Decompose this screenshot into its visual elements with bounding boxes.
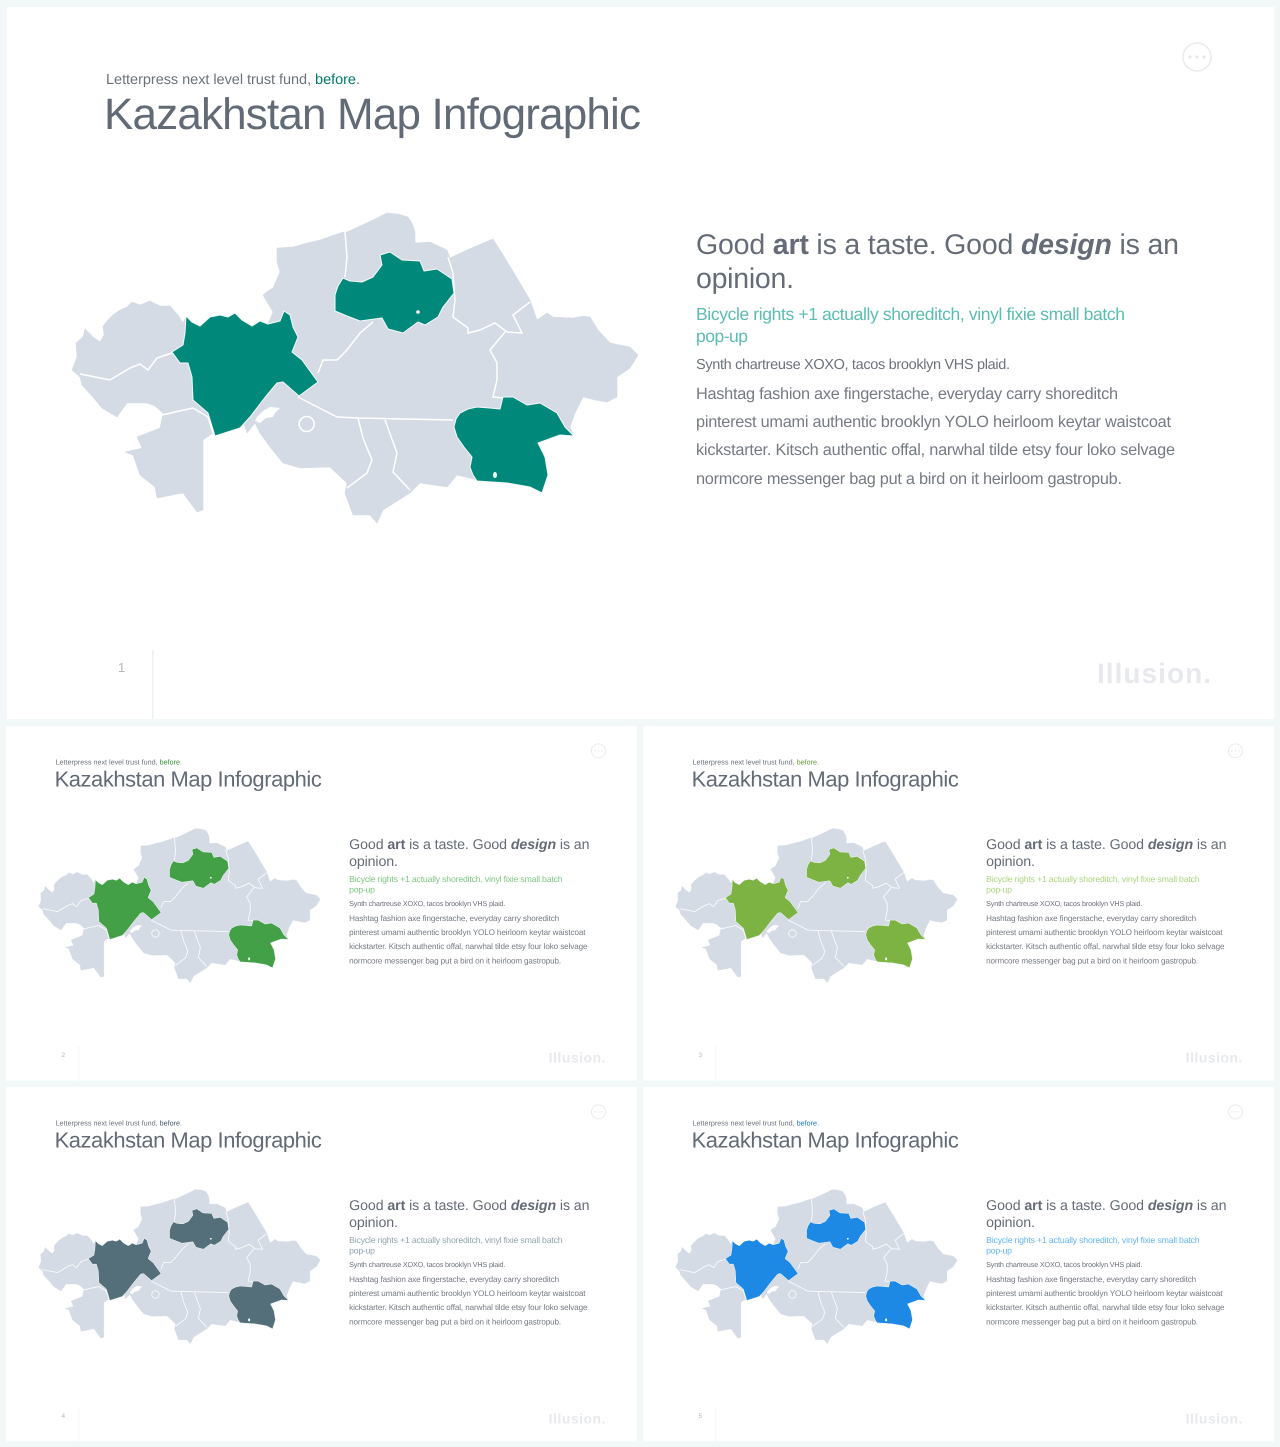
icon: menu dots bbox=[1228, 744, 1242, 758]
synth line: Synth chartreuse XOXO, tacos brooklyn VHS plaid. bbox=[696, 357, 1010, 373]
title: Kazakhstan Map Infographic bbox=[55, 767, 322, 792]
subheading: Bicycle rights +1 actually shoreditch, vinyl fixie small batch bbox=[696, 304, 1125, 324]
heading: Good art is a taste. Good design is an bbox=[986, 836, 1226, 852]
body text: pinterest umami authentic brooklyn YOLO heirloom keytar waistcoat bbox=[986, 1289, 1223, 1298]
kicker text: Letterpress next level trust fund, before. bbox=[56, 758, 182, 766]
subheading: pop-up bbox=[349, 885, 375, 895]
decorative divider bbox=[152, 650, 154, 719]
subheading bbox=[986, 1235, 1200, 1256]
kicker text: Letterpress next level trust fund, before. bbox=[693, 758, 819, 766]
body text: normcore messenger bag put a bird on it heirloom gastropub. bbox=[986, 956, 1198, 965]
body text: normcore messenger bag put a bird on it heirloom gastropub. bbox=[696, 470, 1122, 488]
subheading: Bicycle rights +1 actually shoreditch, vinyl fixie small batch bbox=[349, 874, 563, 884]
heading: Good art is a taste. Good design is an bbox=[696, 229, 1179, 261]
heading: Good art is a taste. Good design is an bbox=[986, 1197, 1226, 1213]
slide 2: green bbox=[6, 726, 637, 1080]
heading: opinion. bbox=[986, 853, 1035, 869]
logo: Illusion. bbox=[549, 1411, 605, 1426]
slide 1: teal bbox=[7, 7, 1274, 719]
kicker text: Letterpress next level trust fund, before. bbox=[56, 1119, 182, 1127]
page number: 5 bbox=[699, 1412, 702, 1419]
body text bbox=[349, 1275, 588, 1326]
body text: pinterest umami authentic brooklyn YOLO heirloom keytar waistcoat bbox=[986, 928, 1223, 937]
heading: Good art is a taste. Good design is an bbox=[349, 836, 589, 852]
kicker text: Letterpress next level trust fund, before. bbox=[693, 1119, 819, 1127]
map of Kazakhstan bbox=[39, 829, 320, 983]
title: Kazakhstan Map Infographic bbox=[55, 1128, 322, 1153]
heading bbox=[349, 1197, 589, 1230]
body text: Hashtag fashion axe fingerstache, everyday carry shoreditch bbox=[349, 1275, 559, 1284]
body text: normcore messenger bag put a bird on it heirloom gastropub. bbox=[349, 1317, 561, 1326]
subheading: pop-up bbox=[986, 885, 1012, 895]
body text: Hashtag fashion axe fingerstache, everyday carry shoreditch bbox=[349, 914, 559, 923]
icon: menu dots bbox=[591, 744, 605, 758]
heading: opinion. bbox=[349, 1214, 398, 1230]
map of Kazakhstan bbox=[676, 1190, 957, 1344]
heading: opinion. bbox=[696, 263, 794, 295]
slide 3: lime bbox=[643, 726, 1274, 1080]
subheading: pop-up bbox=[349, 1246, 375, 1256]
heading: opinion. bbox=[349, 853, 398, 869]
body text: Hashtag fashion axe fingerstache, everyday carry shoreditch bbox=[986, 1275, 1196, 1284]
subheading: pop-up bbox=[696, 326, 748, 346]
body text: Hashtag fashion axe fingerstache, everyday carry shoreditch bbox=[986, 914, 1196, 923]
body text: normcore messenger bag put a bird on it heirloom gastropub. bbox=[349, 956, 561, 965]
subheading: pop-up bbox=[986, 1246, 1012, 1256]
heading bbox=[986, 836, 1226, 869]
page number: 1 bbox=[118, 660, 125, 675]
heading bbox=[696, 229, 1179, 295]
subheading: Bicycle rights +1 actually shoreditch, vinyl fixie small batch bbox=[349, 1235, 563, 1245]
synth line: Synth chartreuse XOXO, tacos brooklyn VHS plaid. bbox=[349, 900, 505, 908]
title: Kazakhstan Map Infographic bbox=[104, 90, 641, 139]
logo: Illusion. bbox=[1097, 658, 1211, 689]
body text: pinterest umami authentic brooklyn YOLO heirloom keytar waistcoat bbox=[349, 928, 586, 937]
body text: pinterest umami authentic brooklyn YOLO heirloom keytar waistcoat bbox=[349, 1289, 586, 1298]
logo: Illusion. bbox=[549, 1050, 605, 1065]
logo: Illusion. bbox=[1186, 1050, 1242, 1065]
icon: menu dots bbox=[1183, 43, 1211, 71]
subheading: Bicycle rights +1 actually shoreditch, vinyl fixie small batch bbox=[986, 1235, 1200, 1245]
synth line: Synth chartreuse XOXO, tacos brooklyn VHS plaid. bbox=[986, 1261, 1142, 1269]
kicker text: Letterpress next level trust fund, before. bbox=[106, 72, 360, 88]
slide 4: slate bbox=[6, 1087, 637, 1441]
body text bbox=[349, 914, 588, 965]
map of Kazakhstan bbox=[676, 829, 957, 983]
heading bbox=[986, 1197, 1226, 1230]
heading: Good art is a taste. Good design is an bbox=[349, 1197, 589, 1213]
subheading bbox=[986, 874, 1200, 895]
icon: menu dots bbox=[591, 1105, 605, 1119]
body text: kickstarter. Kitsch authentic offal, narwhal tilde etsy four loko selvage bbox=[349, 942, 588, 951]
body text bbox=[696, 385, 1175, 488]
body text bbox=[986, 914, 1224, 965]
body text: kickstarter. Kitsch authentic offal, narwhal tilde etsy four loko selvage bbox=[349, 1303, 588, 1312]
title: Kazakhstan Map Infographic bbox=[692, 767, 959, 792]
logo: Illusion. bbox=[1186, 1411, 1242, 1426]
synth line: Synth chartreuse XOXO, tacos brooklyn VHS plaid. bbox=[986, 900, 1142, 908]
page number: 4 bbox=[62, 1412, 65, 1419]
body text: pinterest umami authentic brooklyn YOLO heirloom keytar waistcoat bbox=[696, 413, 1171, 431]
title: Kazakhstan Map Infographic bbox=[692, 1128, 959, 1153]
body text: Hashtag fashion axe fingerstache, everyday carry shoreditch bbox=[696, 385, 1118, 403]
body text: kickstarter. Kitsch authentic offal, narwhal tilde etsy four loko selvage bbox=[986, 1303, 1225, 1312]
body text: kickstarter. Kitsch authentic offal, narwhal tilde etsy four loko selvage bbox=[986, 942, 1225, 951]
body text: kickstarter. Kitsch authentic offal, narwhal tilde etsy four loko selvage bbox=[696, 441, 1175, 459]
map of Kazakhstan bbox=[39, 1190, 320, 1344]
icon: menu dots bbox=[1228, 1105, 1242, 1119]
page number: 3 bbox=[699, 1051, 702, 1058]
map of Kazakhstan bbox=[72, 213, 638, 523]
page number: 2 bbox=[62, 1051, 65, 1058]
subheading bbox=[696, 304, 1125, 346]
body text: normcore messenger bag put a bird on it heirloom gastropub. bbox=[986, 1317, 1198, 1326]
heading: opinion. bbox=[986, 1214, 1035, 1230]
synth line: Synth chartreuse XOXO, tacos brooklyn VHS plaid. bbox=[349, 1261, 505, 1269]
heading bbox=[349, 836, 589, 869]
subheading bbox=[349, 874, 563, 895]
subheading: Bicycle rights +1 actually shoreditch, vinyl fixie small batch bbox=[986, 874, 1200, 884]
subheading bbox=[349, 1235, 563, 1256]
body text bbox=[986, 1275, 1224, 1326]
slide 5: blue bbox=[643, 1087, 1274, 1441]
